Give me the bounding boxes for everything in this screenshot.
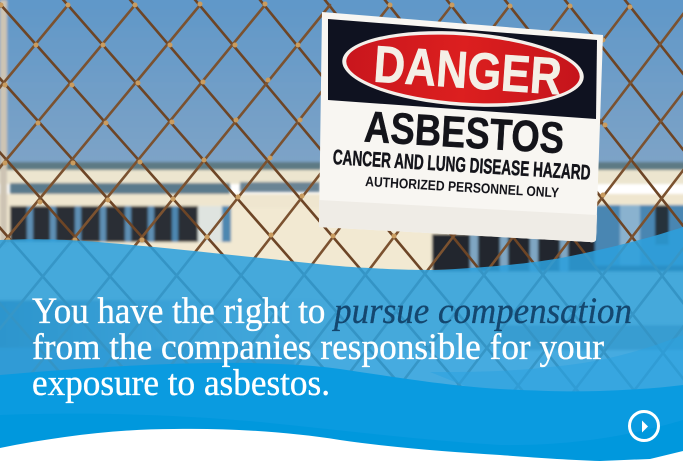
- sign board: [319, 12, 603, 242]
- translucent upper wave: [0, 227, 683, 462]
- red danger oval: [340, 24, 586, 114]
- icon: play button: [630, 412, 658, 440]
- bottom blue band: [0, 414, 683, 462]
- DANGER text: DANGER: [372, 36, 563, 107]
- personnel line: AUTHORIZED PERSONNEL ONLY: [365, 173, 560, 201]
- translucent middle band: [430, 335, 683, 400]
- headline line 1: You have the right to pursue compensation: [32, 291, 632, 332]
- ASBESTOS text: ASBESTOS: [363, 103, 565, 163]
- lower solid wave: [0, 363, 683, 462]
- headline: [32, 291, 632, 404]
- headline line 2: from the companies responsible for your: [32, 327, 604, 368]
- danger sign: [319, 12, 603, 242]
- bottom white wave: [0, 429, 683, 462]
- black header panel: [328, 19, 597, 119]
- headline line 3: exposure to asbestos.: [32, 363, 330, 404]
